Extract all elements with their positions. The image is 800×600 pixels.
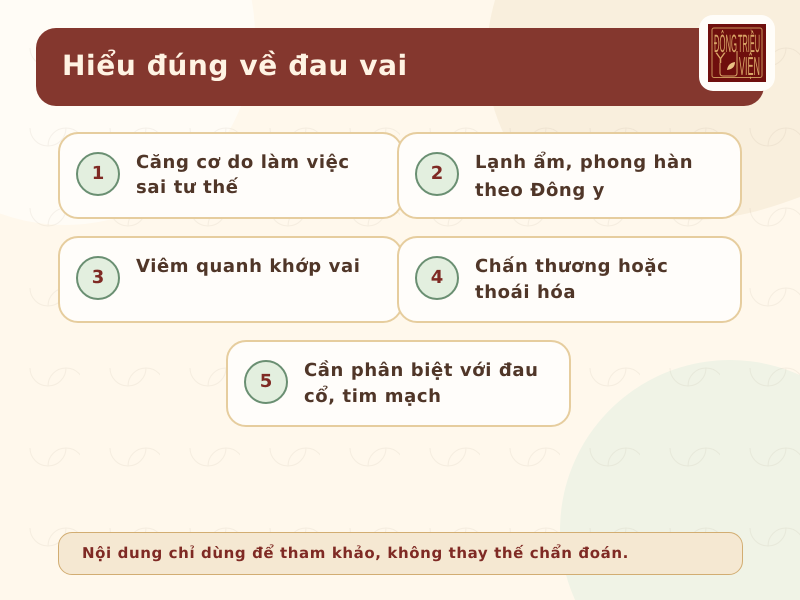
title: Hiểu đúng về đau vai: [62, 49, 408, 82]
logo: [699, 15, 775, 91]
number 3: [76, 256, 120, 300]
logo: Y: [715, 50, 726, 67]
text 5: cổ, tim mạch: [304, 386, 442, 407]
text 2: theo Đông y: [475, 180, 605, 201]
disclaimer note: [58, 532, 743, 575]
number 3: 3: [92, 267, 104, 288]
number 4: 4: [431, 267, 443, 288]
number 5: [244, 360, 288, 404]
text 1: Căng cơ do làm việc: [136, 152, 350, 173]
number 1: 1: [92, 163, 104, 184]
text 5: Cần phân biệt với đau: [304, 360, 538, 381]
number 2: [415, 152, 459, 196]
text 4: Chấn thương hoặc: [475, 256, 668, 277]
number 1: [76, 152, 120, 196]
text 4: thoái hóa: [475, 282, 576, 303]
text 2: [475, 152, 693, 201]
header banner: [36, 28, 764, 106]
card 2: [397, 132, 742, 219]
text 5: [304, 360, 538, 407]
number 4: [415, 256, 459, 300]
text 4: [475, 256, 668, 303]
card 5: [226, 340, 571, 427]
text 1: sai tư thế: [136, 177, 239, 198]
card 3: [58, 236, 403, 323]
card 1: [58, 132, 403, 219]
number 2: 2: [431, 163, 443, 184]
disclaimer text: Nội dung chỉ dùng để tham khảo, không thay thế chẩn đoán.: [82, 544, 629, 562]
text 1: [136, 152, 350, 198]
number 5: 5: [260, 371, 272, 392]
text 2: Lạnh ẩm, phong hàn: [475, 152, 693, 173]
text 3: Viêm quanh khớp vai: [136, 256, 361, 277]
card 4: [397, 236, 742, 323]
